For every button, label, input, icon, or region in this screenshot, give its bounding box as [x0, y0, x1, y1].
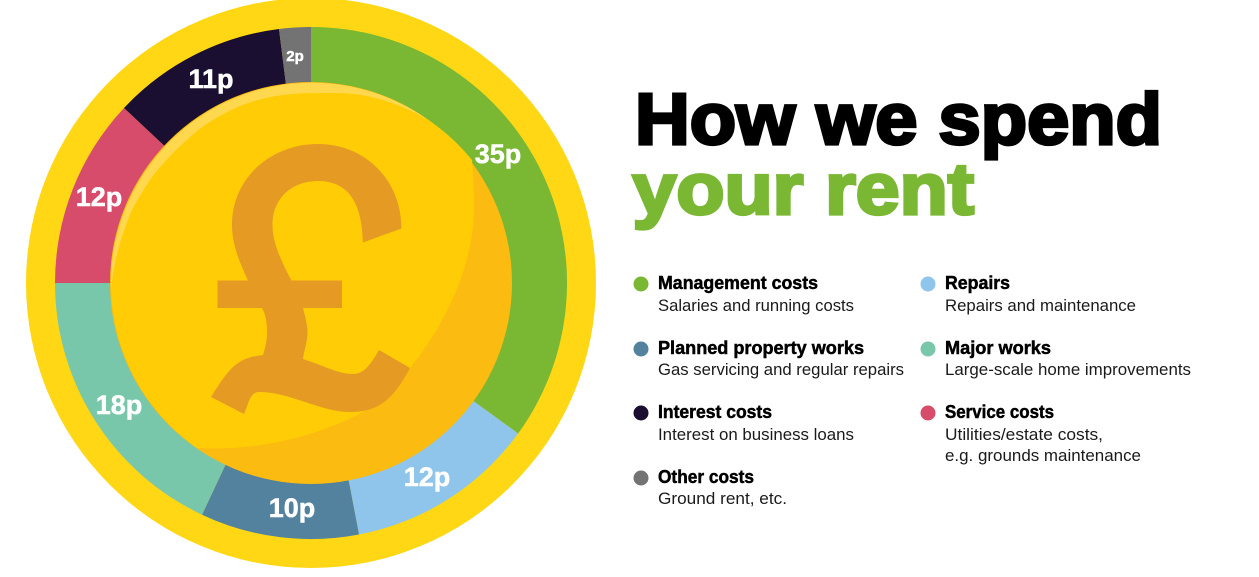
legend: major works: Major works — [945, 337, 1051, 358]
legend: other costs: Ground rent, etc. — [658, 489, 787, 508]
legend: management costs: Salaries and running costs — [658, 296, 854, 315]
slice: major works 18p — [55, 283, 311, 515]
legend: service costs: e.g. grounds maintenance — [945, 446, 1141, 465]
legend: interest costs — [634, 401, 854, 444]
label 11p: 11p — [188, 64, 234, 94]
legend: major works: Large-scale home improvements — [945, 360, 1191, 379]
value labels — [76, 48, 521, 523]
label 10p: 10p — [269, 493, 315, 523]
label 18p: 18p — [96, 390, 142, 420]
title line 1: How we spend — [635, 79, 1162, 160]
coin — [110, 82, 512, 484]
label 35p: 35p — [475, 139, 521, 169]
legend — [634, 272, 1191, 508]
slice: service costs 12p — [55, 108, 311, 283]
slice: management costs 35p — [311, 27, 567, 434]
title — [632, 79, 1162, 230]
legend: planned property works: Gas servicing and regular repairs — [658, 360, 904, 379]
donut chart: rent breakdown — [26, 0, 596, 568]
legend: repairs: Repairs and maintenance — [945, 296, 1136, 315]
legend: planned property works: Planned property works — [658, 337, 864, 358]
title line 2: your rent — [632, 149, 974, 230]
legend: other costs — [634, 466, 787, 508]
legend: major works — [920, 337, 1191, 379]
legend: management costs: Management costs — [658, 272, 818, 293]
legend: interest costs: Interest costs — [658, 401, 772, 422]
label 2p: 2p — [286, 48, 304, 65]
label 12p service: 12p — [76, 182, 122, 212]
slice: planned property works 10p — [202, 283, 359, 539]
pound symbol — [211, 144, 410, 414]
legend: repairs — [920, 272, 1136, 315]
coin highlight crescent — [111, 83, 427, 290]
legend: interest costs: Interest on business loans — [658, 425, 854, 444]
coin base — [110, 82, 512, 484]
legend: management costs — [634, 272, 854, 315]
legend: service costs: Service costs — [945, 401, 1054, 422]
legend: service costs — [920, 401, 1141, 465]
legend: repairs: Repairs — [945, 272, 1010, 293]
slice: repairs 12p — [311, 283, 518, 534]
coin face — [111, 93, 474, 448]
slice: other costs 2p — [279, 27, 311, 283]
slice: interest costs 11p — [124, 29, 311, 283]
legend: other costs: Other costs — [658, 466, 754, 487]
legend: service costs: Utilities/estate costs, — [945, 425, 1103, 444]
outer yellow ring — [26, 0, 596, 568]
legend: planned property works — [634, 337, 904, 379]
label 12p repairs: 12p — [404, 462, 450, 492]
